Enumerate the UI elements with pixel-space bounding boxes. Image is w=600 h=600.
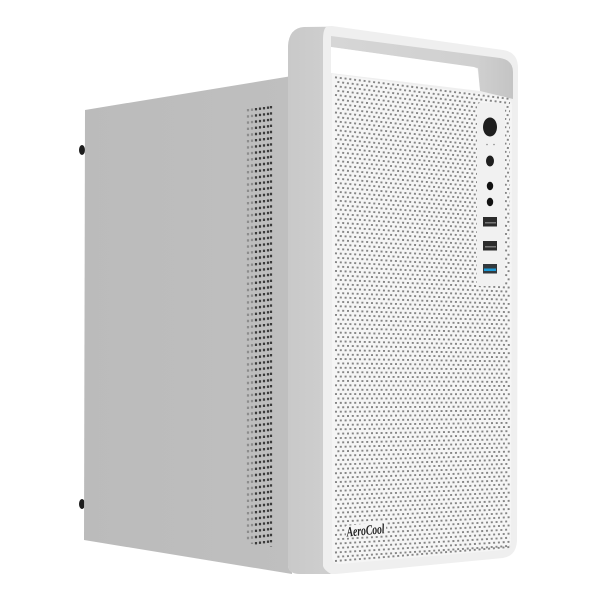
- vent columns, dark: [256, 106, 271, 547]
- foot: bottom rear: [79, 499, 85, 509]
- front mesh perforations: [335, 77, 510, 561]
- USB port 2: [483, 241, 497, 250]
- logo backing: [346, 521, 386, 538]
- USB port 1: [483, 217, 497, 226]
- side vent perforations: [248, 106, 271, 547]
- USB 3.0 port: [483, 264, 497, 274]
- audio jack: microphone: [487, 198, 493, 206]
- front I/O panel: [477, 103, 505, 286]
- power button: [483, 118, 497, 136]
- handle recess shading: [331, 36, 513, 99]
- panel: side of case: [84, 76, 292, 574]
- handle opening: [331, 47, 480, 91]
- brand logo: [345, 521, 386, 541]
- reset button: [486, 156, 494, 166]
- panel: front frame with handle: [288, 26, 518, 574]
- logo wordmark: AeroCool: [345, 522, 385, 541]
- front pillar shading: [288, 27, 331, 574]
- audio jack: headphones: [487, 182, 493, 190]
- vent columns, faded: [248, 108, 252, 544]
- front mesh plate: [332, 74, 512, 564]
- status LEDs: [486, 144, 495, 145]
- foot: top rear: [79, 145, 85, 155]
